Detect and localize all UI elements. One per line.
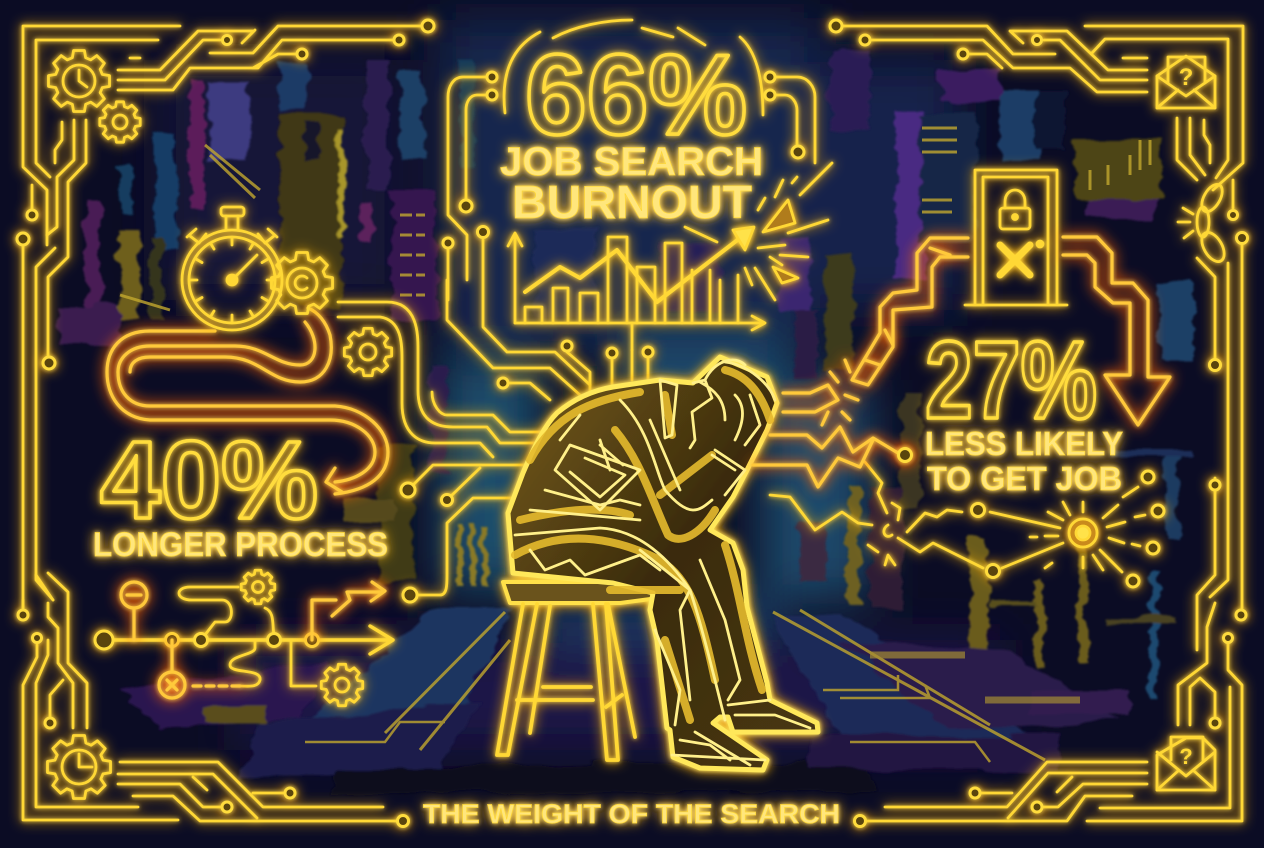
- icon: gear on stopwatch: [271, 252, 333, 314]
- connector lines to figure: [338, 226, 653, 602]
- icon: top-left clock gear: [48, 50, 110, 112]
- jagged pulse lines: [753, 427, 898, 487]
- frame: top-right circuit corner: [830, 20, 1248, 650]
- red and orange right arrows: [753, 237, 1170, 487]
- arc above stat: [504, 20, 763, 115]
- process timeline: [95, 570, 393, 706]
- label: longer process: LONGER PROCESS: [93, 526, 388, 564]
- arrow: stair path down to red arrowhead: [1063, 237, 1170, 425]
- icon: gear beside path: [344, 328, 392, 376]
- stat: 27%: 27%: [925, 319, 1097, 442]
- icon: locked door: [965, 170, 1067, 305]
- frame: bottom-right circuit corner: [854, 603, 1242, 826]
- stat: 66%: 66%: [525, 32, 747, 159]
- icon: failed cross marker: [159, 640, 240, 698]
- icon: stop minus marker: [121, 582, 147, 640]
- connector lines around 66%: [448, 72, 815, 280]
- burst node cluster: [770, 462, 1164, 587]
- icon: stopwatch: [182, 207, 282, 330]
- stool: [497, 582, 658, 760]
- icon: small gear top-left: [100, 102, 140, 142]
- icon: bottom-right question envelope: ?: [1179, 744, 1193, 769]
- label: less likely to get job: TO GET JOB: [927, 460, 1122, 497]
- figure: man with head in hands: [508, 357, 818, 770]
- painted window streaks and street edges: [120, 128, 1150, 762]
- frame: top-left circuit corner: [17, 20, 434, 607]
- winding path with orange glow: [107, 308, 388, 494]
- icon: top-right question envelope: [1157, 56, 1215, 108]
- orange process details: [121, 582, 385, 698]
- arrow: broken stair path left: [852, 238, 968, 385]
- right side: door and stat: [423, 170, 1164, 829]
- center network and chart: [338, 20, 832, 602]
- line and bar chart: [508, 227, 765, 350]
- break burst: [783, 360, 858, 425]
- icon: broken chain: [1178, 181, 1229, 265]
- icon: bottom-left clock gear: [47, 735, 111, 799]
- title: THE WEIGHT OF THE SEARCH: [423, 799, 840, 829]
- label: job search burnout: [500, 140, 763, 228]
- label: less likely to get job: [925, 425, 1123, 497]
- icon: bottom-right question envelope: [1157, 737, 1215, 790]
- stopwatch, gears and left stat: [93, 207, 393, 706]
- label: job search burnout: JOB SEARCH: [500, 140, 763, 184]
- arrow: orange branch: [312, 582, 385, 640]
- icon: top-right question envelope: ?: [1179, 64, 1193, 91]
- stool and man: [497, 357, 818, 770]
- stat: 40%: 40%: [100, 419, 318, 542]
- label: job search burnout: BURNOUT: [512, 176, 752, 228]
- label: less likely to get job: LESS LIKELY: [925, 425, 1123, 462]
- frame: bottom-left circuit corner: [18, 573, 408, 826]
- icon: spark burst: [685, 163, 832, 300]
